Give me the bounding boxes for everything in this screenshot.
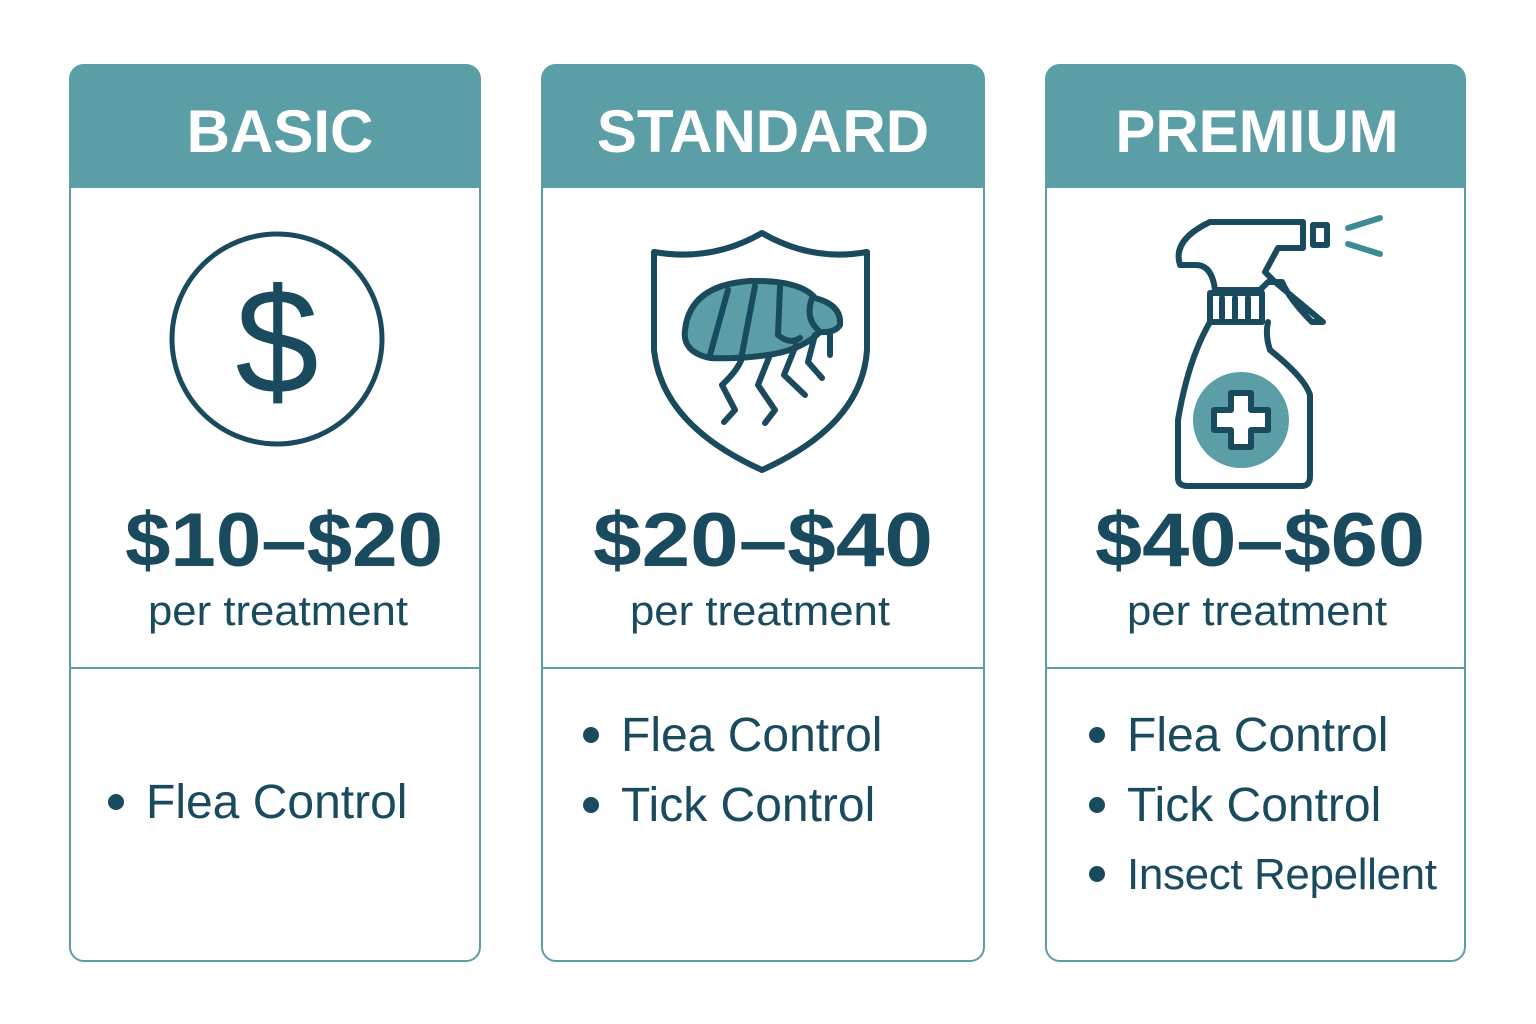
- price: basic: per treatment: [148, 587, 408, 634]
- panel: basic: [70, 65, 480, 961]
- features: premium: Flea Control: [1127, 709, 1388, 762]
- price: standard: [593, 498, 933, 634]
- features: standard: Flea Control: [621, 709, 882, 762]
- price: standard: $20–$40: [593, 498, 933, 583]
- features: premium: Tick Control: [1127, 779, 1381, 832]
- price: premium: per treatment: [1127, 587, 1387, 634]
- header: standard: STANDARD: [597, 98, 929, 165]
- icon: dollar coin: [172, 234, 382, 444]
- icon: dollar coin: $: [235, 257, 319, 425]
- price: premium: [1095, 498, 1425, 634]
- panel: standard: [542, 65, 984, 961]
- features: basic: Flea Control: [146, 776, 407, 829]
- features: premium: [1089, 709, 1437, 899]
- price: standard: per treatment: [630, 587, 890, 634]
- features: premium: Insect Repellent: [1127, 850, 1437, 899]
- features: standard: Tick Control: [621, 779, 875, 832]
- price: basic: [125, 498, 443, 634]
- panel: premium: [1046, 65, 1465, 961]
- header: premium: PREMIUM: [1115, 98, 1399, 165]
- header: standard: [542, 65, 984, 188]
- icon: spray bottle: [1178, 218, 1380, 486]
- icon: flea shield: [654, 233, 867, 470]
- features: standard: [583, 709, 882, 832]
- price: basic: $10–$20: [125, 498, 443, 583]
- header: basic: [70, 65, 480, 188]
- price: premium: $40–$60: [1095, 498, 1425, 583]
- header: premium: [1046, 65, 1465, 188]
- header: basic: BASIC: [187, 98, 373, 165]
